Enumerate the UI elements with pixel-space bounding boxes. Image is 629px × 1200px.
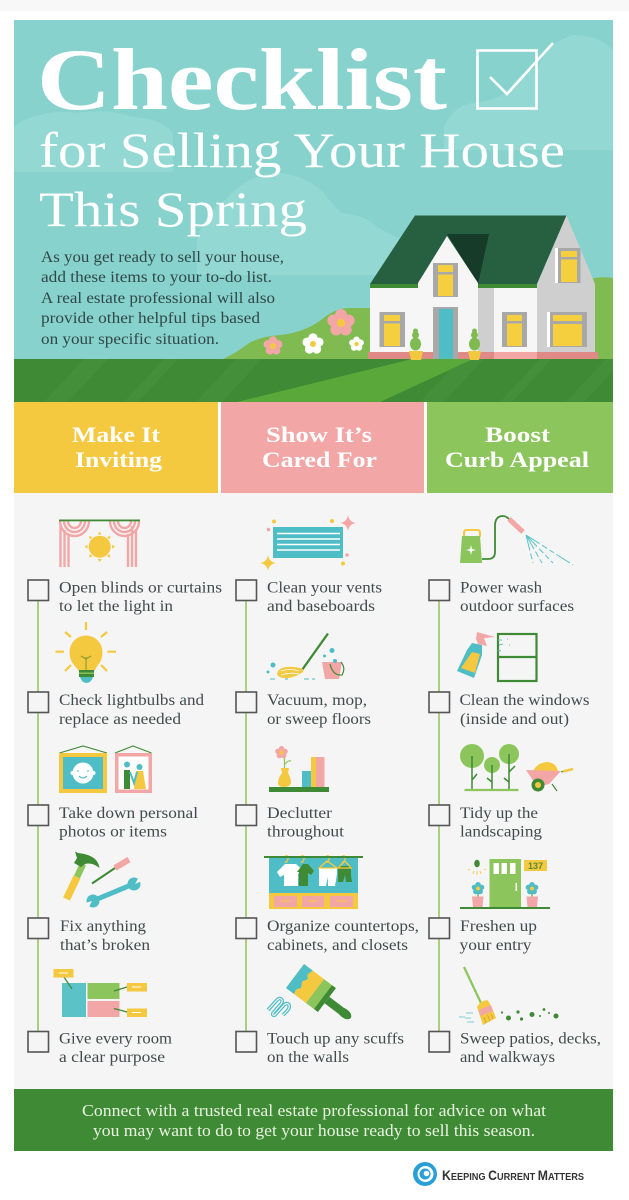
item: floors: or sweep floors — [267, 711, 371, 728]
checkbox: open blinds — [28, 580, 48, 600]
item: closets: cabinets, and closets — [267, 937, 408, 954]
item: personal photos — [59, 805, 199, 840]
icon: tools — [66, 852, 142, 909]
icon: power washer — [460, 516, 573, 565]
panel: show it's cared for header — [221, 402, 424, 493]
item: fix broken — [60, 918, 150, 954]
icon: front door: 137 — [528, 861, 543, 871]
footer banner: you may want to do to get your house ready to sell this season. — [93, 1121, 535, 1140]
item: lightbulbs: replace as needed — [59, 711, 181, 728]
panel: boost curb appeal header: Boost — [485, 422, 551, 447]
icon: title checkbox — [478, 43, 553, 108]
panel: make it inviting header: Inviting — [75, 447, 162, 472]
intro text: add these items to your to-do list. — [41, 269, 272, 286]
checkbox: lightbulbs — [28, 692, 48, 712]
item: fix broken: that’s broken — [60, 937, 150, 954]
item: vents — [267, 580, 382, 615]
item: open blinds: Open blinds or curtains — [59, 580, 222, 596]
item: open blinds: to let the light in — [59, 598, 173, 615]
column one — [28, 520, 222, 1066]
flowers — [264, 309, 364, 355]
item: closets: Organize countertops, — [267, 918, 419, 935]
item: entry: Freshen up — [460, 918, 537, 935]
footer banner — [14, 1089, 613, 1151]
item: fix broken: Fix anything — [60, 918, 146, 935]
panel: show it's cared for header: Show It’s — [266, 422, 373, 447]
item: declutter: throughout — [267, 824, 345, 840]
intro text: A real estate professional will also — [41, 290, 275, 307]
intro text: As you get ready to sell your house, — [41, 249, 284, 266]
checkbox: floors — [236, 692, 256, 712]
house — [368, 216, 598, 360]
item: open blinds — [59, 580, 222, 615]
item: patios: and walkways — [460, 1049, 555, 1066]
icon: lightbulb — [56, 622, 116, 683]
item: landscaping: Tidy up the — [460, 805, 538, 822]
footer banner: Connect with a trusted real estate professional for advice on what — [82, 1101, 546, 1120]
item: scuffs — [267, 1030, 404, 1066]
item: personal photos: Take down personal — [59, 805, 199, 822]
checkbox: declutter — [236, 805, 256, 826]
item: windows: Clean the windows — [460, 692, 590, 709]
item: vents: and baseboards — [267, 598, 375, 615]
title: Checklist: Checklist — [37, 32, 447, 129]
panel: make it inviting header: Make It — [72, 422, 161, 447]
panel: checklist body — [14, 493, 613, 1089]
item: power wash — [460, 580, 574, 615]
intro text — [41, 249, 284, 348]
item: entry: your entry — [460, 937, 532, 954]
subtitle line one: for Selling Your House — [39, 122, 565, 178]
item: landscaping: landscaping — [460, 824, 542, 840]
icon: tidy shelf — [269, 746, 329, 792]
item: patios — [460, 1030, 601, 1066]
icon: floor plan — [54, 969, 147, 1017]
item: lightbulbs: Check lightbulbs and — [59, 692, 204, 709]
item: personal photos: photos or items — [59, 824, 167, 840]
panel: hero — [14, 20, 613, 402]
panel: make it inviting header — [14, 402, 218, 493]
item: scuffs: Touch up any scuffs — [267, 1030, 404, 1048]
icon: trees and wheelbarrow — [460, 744, 573, 792]
logo: keeping current matters: KEEPING CURRENT MATTERS — [442, 1167, 584, 1183]
checkbox: room purpose — [28, 1032, 48, 1052]
logo: keeping current matters — [413, 1162, 584, 1186]
grass lawn — [14, 359, 613, 402]
icon: mop and bucket — [266, 634, 344, 679]
clouds — [14, 35, 613, 275]
hills — [221, 277, 613, 360]
icon: clean vent — [260, 515, 356, 571]
item: scuffs: on the walls — [267, 1049, 349, 1066]
icon: paint brush — [268, 964, 360, 1030]
item: power wash: outdoor surfaces — [460, 598, 574, 615]
checkbox: entry — [429, 918, 450, 938]
item: floors: Vacuum, mop, — [267, 692, 367, 709]
icon: picture frames — [59, 746, 152, 793]
item: patios: Sweep patios, decks, — [460, 1030, 601, 1048]
item: windows — [460, 692, 590, 728]
item: windows: (inside and out) — [460, 711, 569, 728]
icon: window and spray bottle — [457, 632, 537, 681]
checkbox: power wash — [429, 580, 450, 600]
subtitle line two: This Spring — [39, 181, 307, 237]
item: closets — [267, 918, 419, 954]
item: entry — [460, 918, 537, 954]
item: declutter: Declutter — [267, 805, 333, 822]
checkbox: landscaping — [429, 805, 450, 826]
item: vents: Clean your vents — [267, 580, 382, 596]
panel: boost curb appeal header: Curb Appeal — [445, 447, 589, 472]
checkbox: scuffs — [236, 1032, 256, 1052]
panel: show it's cared for header: Cared For — [262, 447, 377, 472]
icon: front door — [460, 859, 550, 909]
panel: boost curb appeal header — [427, 402, 613, 493]
checkbox: windows — [429, 692, 450, 712]
checkbox: personal photos — [28, 805, 48, 826]
checkbox: closets — [236, 918, 256, 938]
intro text: on your specific situation. — [41, 331, 219, 348]
item: room purpose: Give every room — [59, 1030, 173, 1048]
intro text: provide other helpful tips based — [41, 310, 260, 327]
item: power wash: Power wash — [460, 580, 542, 596]
item: declutter — [267, 805, 345, 840]
checkbox: patios — [429, 1032, 450, 1052]
checkbox: fix broken — [28, 918, 48, 938]
icon: closet and clothes — [264, 856, 363, 909]
column two — [236, 515, 419, 1066]
item: floors — [267, 692, 371, 728]
item: lightbulbs — [59, 692, 204, 728]
item: landscaping — [460, 805, 542, 840]
item: room purpose — [59, 1030, 173, 1066]
checkbox: vents — [236, 580, 256, 600]
item: room purpose: a clear purpose — [59, 1049, 165, 1066]
column three — [429, 516, 601, 1066]
icon: broom — [459, 967, 558, 1025]
icon: curtains and sun — [59, 520, 140, 567]
